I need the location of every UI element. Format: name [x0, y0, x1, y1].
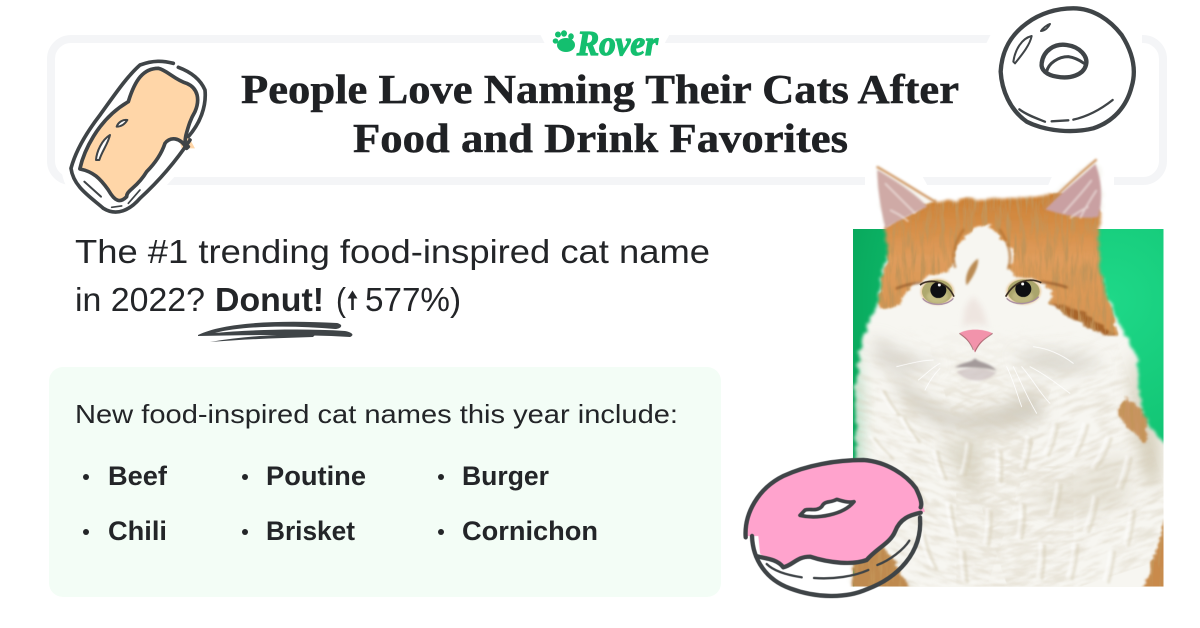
- name list: Brisket: [266, 516, 355, 546]
- name list: Chili: [108, 516, 167, 546]
- highlighted name: Donut!: [215, 281, 324, 318]
- forehead mark: [966, 259, 978, 285]
- icon: paw: [553, 30, 575, 52]
- icon: plain donut outline: [1001, 8, 1134, 131]
- whiskers: [897, 347, 1073, 413]
- name list: [83, 461, 598, 546]
- cat figure: [849, 158, 1164, 587]
- title: Food and Drink Favorites: [353, 115, 848, 161]
- nose: [962, 297, 988, 327]
- shading: [843, 337, 1160, 516]
- lead text: [75, 233, 710, 318]
- brow shadows: [897, 230, 1067, 288]
- lead text: The #1 trending food-inspired cat name: [75, 233, 710, 270]
- panel: new food-inspired names: [49, 367, 721, 597]
- name list: Burger: [462, 461, 549, 491]
- mouth: [957, 368, 996, 381]
- name list: Poutine: [266, 461, 366, 491]
- header frame: [51, 30, 1163, 190]
- green backdrop: [853, 229, 1164, 587]
- eyes: [920, 278, 1041, 305]
- panel intro text: New food-inspired cat names this year include:: [75, 399, 678, 429]
- logo: Rover: Rover: [576, 24, 658, 63]
- title: People Love Naming Their Cats After: [241, 66, 959, 112]
- lead text: (: [336, 281, 346, 318]
- fur texture: [858, 350, 1164, 586]
- scribble underline: [198, 322, 352, 342]
- cream fur strokes: [875, 392, 1135, 582]
- ears: [877, 170, 927, 228]
- icon: donut with pink frosting: [746, 460, 925, 596]
- title: [241, 66, 959, 161]
- orange fur patches: [850, 192, 1168, 590]
- icon: toast slice with spread: [71, 61, 205, 212]
- lead text: 577%): [365, 281, 461, 318]
- photo: orange and white cat on green: [849, 158, 1164, 587]
- icon: up arrow: [348, 290, 358, 310]
- pale fur highlights: [870, 390, 1130, 580]
- name list: Beef: [108, 461, 168, 491]
- lead text: in 2022?: [75, 281, 205, 318]
- name list: Cornichon: [462, 516, 598, 546]
